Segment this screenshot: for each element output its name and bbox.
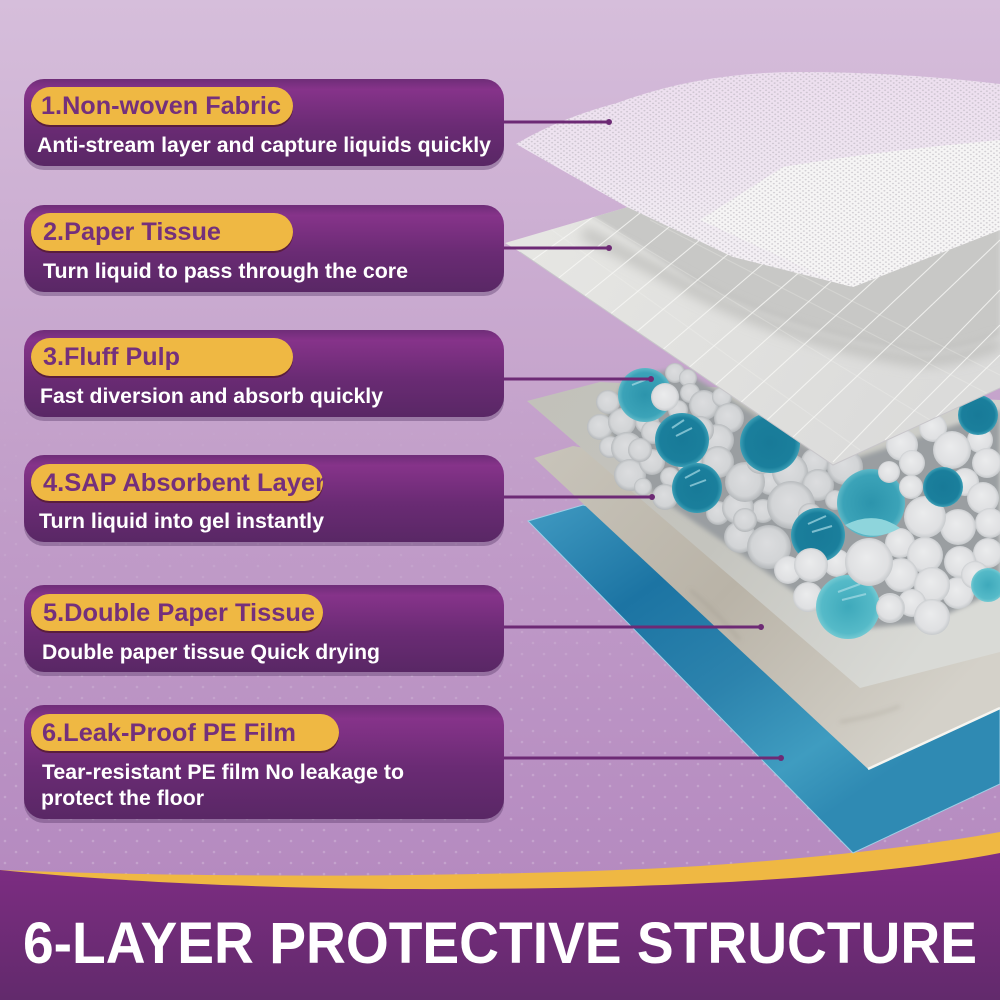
- beads: front white: [651, 383, 925, 622]
- panel 5: double paper tissue: [24, 585, 504, 676]
- panel 4: SAP absorbent layer: Turn liquid into gel instantly: [39, 510, 324, 533]
- panel 1: non-woven fabric: [24, 79, 504, 170]
- panel 6: leak-proof PE film: protect the floor: [41, 787, 204, 810]
- panel 5: double paper tissue: 5.Double Paper Tissue: [43, 599, 315, 627]
- panel 2: paper tissue: 2.Paper Tissue: [43, 218, 221, 246]
- layer 6: blue leak-proof PE film: [528, 505, 1000, 853]
- layer 5: double paper tissue: [534, 446, 1000, 769]
- panel 3: fluff pulp: Fast diversion and absorb quickly: [40, 385, 383, 408]
- panel 6: leak-proof PE film: Tear-resistant PE film No leakage to: [42, 761, 404, 784]
- layer 1: non-woven fabric: [516, 72, 1000, 287]
- SAP absorbent beads: [587, 363, 1000, 639]
- panel 4: SAP absorbent layer: 4.SAP Absorbent Layer: [43, 469, 325, 497]
- panel 6: leak-proof PE film: [24, 705, 504, 823]
- panel 2: paper tissue: [24, 205, 504, 296]
- panel 2: paper tissue: Turn liquid to pass through the core: [43, 260, 408, 283]
- shadow cast by top layer: [590, 200, 1000, 352]
- panel 3: fluff pulp: [24, 330, 504, 421]
- layer 2: paper tissue with grid: [505, 200, 1000, 465]
- callout leader lines: [504, 119, 784, 761]
- panel 3: fluff pulp: 3.Fluff Pulp: [43, 343, 180, 371]
- footer banner with gold swoosh: [0, 832, 1000, 1000]
- panel 5: double paper tissue: Double paper tissue Quick drying: [42, 641, 380, 664]
- beads: grey back: [587, 363, 863, 569]
- layer 4: lower tissue sheet under SAP: [527, 382, 1000, 688]
- beads: teal gel: [618, 368, 1000, 639]
- panel 4: SAP absorbent layer: [24, 455, 504, 546]
- title: 6-LAYER PROTECTIVE STRUCTURE: [23, 911, 977, 976]
- panel 1: non-woven fabric: 1.Non-woven Fabric: [41, 92, 281, 120]
- panel 1: non-woven fabric: Anti-stream layer and capture liquids quickly: [37, 134, 491, 157]
- panel 6: leak-proof PE film: 6.Leak-Proof PE Film: [42, 719, 296, 747]
- beads: white right cluster: [774, 414, 1000, 635]
